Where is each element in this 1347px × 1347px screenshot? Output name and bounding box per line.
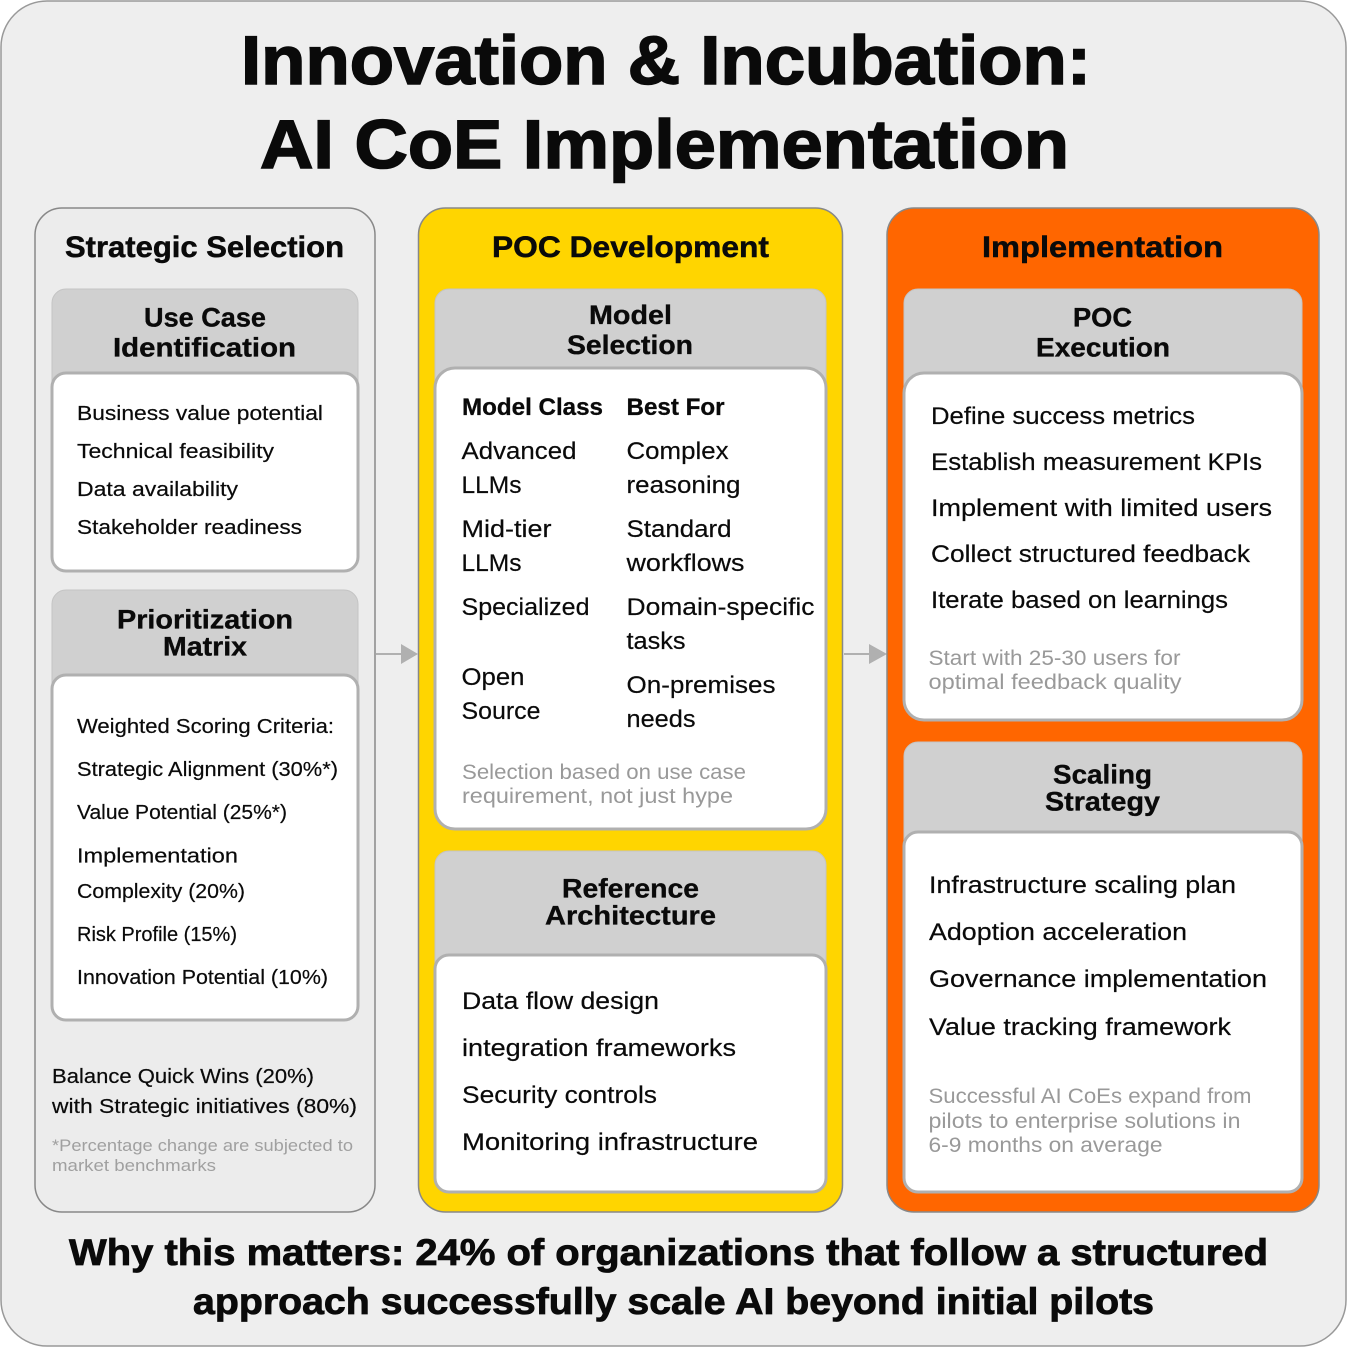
card: Use Case Identification: Data availability xyxy=(77,478,239,501)
card: Prioritization Matrix: Implementation xyxy=(77,844,238,868)
card: Scaling Strategy: Governance implementation xyxy=(929,966,1267,993)
card: Use Case Identification: Use Case xyxy=(144,302,266,332)
table: model classes: LLMs xyxy=(462,550,522,577)
table: model classes: workflows xyxy=(625,550,744,577)
table: model classes: Complex xyxy=(626,438,728,465)
card: Model Selection: Model xyxy=(589,300,672,330)
title: AI CoE Implementation xyxy=(260,106,1069,183)
note: selection: Selection based on use case xyxy=(462,761,746,784)
note: expansion timing: pilots to enterprise solutions in xyxy=(928,1110,1240,1133)
heading: Strategic Selection: Strategic Selection xyxy=(65,231,344,264)
card: Scaling Strategy: Value tracking framework xyxy=(929,1014,1232,1041)
card: Model Selection: Selection xyxy=(567,330,693,360)
card: POC Execution: Establish measurement KPIs xyxy=(931,449,1262,476)
table: model classes xyxy=(462,394,814,733)
panel: POC Development xyxy=(418,208,842,1212)
card: POC Execution: Iterate based on learnings xyxy=(931,587,1228,614)
card: Prioritization Matrix: Prioritization xyxy=(117,604,293,634)
note: pilot size: Start with 25-30 users for xyxy=(928,647,1180,670)
table: model classes: Advanced xyxy=(462,438,576,465)
card: Prioritization Matrix: Weighted Scoring Criteria: xyxy=(77,715,334,738)
footer statement: Why this matters: 24% of organizations that follow a structured xyxy=(69,1232,1268,1273)
card: Reference Architecture: Monitoring infrastructure xyxy=(462,1129,758,1156)
card: POC Execution: Define success metrics xyxy=(931,403,1195,430)
card: POC Execution: Implement with limited users xyxy=(931,495,1272,522)
card: Model Selection xyxy=(435,289,826,829)
footer statement: approach successfully scale AI beyond initial pilots xyxy=(193,1281,1154,1322)
card: POC Execution xyxy=(904,289,1302,720)
note: expansion timing: Successful AI CoEs expand from xyxy=(928,1085,1252,1108)
arrow: selection to POC xyxy=(376,644,418,664)
card: Use Case Identification: Identification xyxy=(113,332,296,362)
card: POC Execution: POC xyxy=(1073,302,1132,332)
card: Prioritization Matrix: Matrix xyxy=(163,632,247,662)
card: POC Execution: Execution xyxy=(1036,332,1170,362)
table: model classes: Best For xyxy=(626,394,724,421)
card: Scaling Strategy: Adoption acceleration xyxy=(929,919,1187,946)
card: Reference Architecture xyxy=(435,851,826,1192)
panel: Implementation xyxy=(887,208,1319,1212)
table: model classes: Open xyxy=(462,664,524,691)
table: model classes: Mid-tier xyxy=(462,516,552,543)
table: model classes: On-premises xyxy=(626,672,776,699)
card: Use Case Identification: Stakeholder readiness xyxy=(77,516,302,539)
note: pilot size: optimal feedback quality xyxy=(928,671,1182,694)
card: Use Case Identification: Technical feasibility xyxy=(77,440,275,463)
footnote: *Percentage change are subjected to xyxy=(52,1136,353,1155)
card: Prioritization Matrix: Innovation Potential (10%) xyxy=(77,966,328,989)
panel: Strategic Selection xyxy=(35,208,375,1212)
card: Prioritization Matrix: Risk Profile (15%) xyxy=(77,923,237,946)
note: expansion timing: 6-9 months on average xyxy=(928,1134,1162,1157)
table: model classes: tasks xyxy=(626,628,686,655)
card: Scaling Strategy: Scaling xyxy=(1053,760,1152,790)
card: Reference Architecture: Security controls xyxy=(462,1082,657,1109)
card: Scaling Strategy xyxy=(904,742,1302,1192)
note: selection xyxy=(462,761,746,808)
footnote: market benchmarks xyxy=(52,1156,216,1175)
card: Use Case Identification: Business value potential xyxy=(77,402,323,425)
card: POC Execution: Collect structured feedback xyxy=(931,541,1251,568)
table: model classes: Source xyxy=(462,698,540,725)
note: expansion timing xyxy=(928,1085,1252,1157)
table: model classes: Model Class xyxy=(462,394,603,421)
card: Reference Architecture: Data flow design xyxy=(462,988,659,1015)
card: Reference Architecture: Reference xyxy=(562,874,699,904)
arrow: POC to implementation xyxy=(844,644,887,664)
note: selection: requirement, not just hype xyxy=(462,785,733,808)
title xyxy=(241,22,1091,183)
footnote xyxy=(52,1136,353,1175)
heading: POC Development: POC Development xyxy=(492,231,769,264)
card: Reference Architecture: Architecture xyxy=(545,900,716,930)
card: Scaling Strategy: Strategy xyxy=(1045,786,1160,816)
table: model classes: needs xyxy=(626,706,696,733)
footer statement xyxy=(69,1232,1268,1322)
card: Prioritization Matrix: Strategic Alignment (30%*) xyxy=(77,758,338,781)
table: model classes: Specialized xyxy=(462,594,590,621)
balance note xyxy=(51,1065,357,1118)
heading: Implementation: Implementation xyxy=(982,231,1223,264)
table: model classes: LLMs xyxy=(462,472,522,499)
balance note: with Strategic initiatives (80%) xyxy=(51,1095,357,1118)
title: Innovation & Incubation: xyxy=(241,22,1091,99)
table: model classes: Standard xyxy=(626,516,732,543)
card: Prioritization Matrix: Value Potential (25%*) xyxy=(77,801,287,824)
table: model classes: Domain-specific xyxy=(626,594,814,621)
card: Use Case Identification xyxy=(52,289,358,571)
card: Scaling Strategy: Infrastructure scaling plan xyxy=(929,872,1236,899)
balance note: Balance Quick Wins (20%) xyxy=(52,1065,314,1088)
card: Prioritization Matrix xyxy=(52,590,358,1020)
table: model classes: reasoning xyxy=(626,472,740,499)
card: Prioritization Matrix: Complexity (20%) xyxy=(77,880,245,903)
card: Reference Architecture: integration frameworks xyxy=(462,1035,736,1062)
note: pilot size xyxy=(928,647,1182,694)
